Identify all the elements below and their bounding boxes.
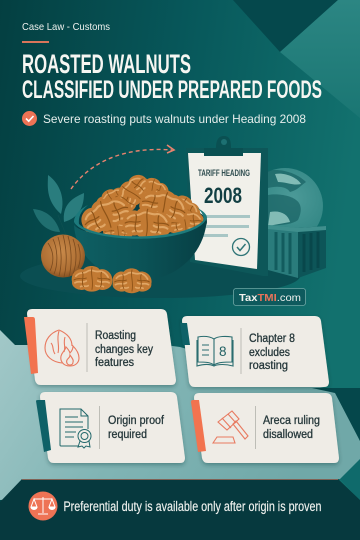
accent rule [22, 41, 49, 43]
icon: certificate with seal [60, 409, 91, 448]
arrow: walnuts to tariff heading [71, 145, 174, 189]
text: required [108, 429, 147, 441]
text: Origin proof [108, 415, 165, 427]
TaxTMI logo [234, 288, 306, 306]
panel: origin proof required [36, 392, 185, 463]
walnut kernels in bowl [76, 169, 205, 240]
divider [99, 406, 100, 449]
icon: gavel [213, 411, 248, 443]
hero platform [20, 254, 300, 298]
divider [255, 406, 256, 449]
text: roasting [249, 360, 288, 372]
clipboard: tariff heading 2008 [186, 136, 268, 276]
icon: leaves [33, 175, 84, 235]
loose walnut kernels [72, 266, 152, 293]
text: Areca ruling [263, 415, 320, 427]
text: changes key [95, 344, 153, 356]
TaxTMI logo: TaxTMI.com [239, 292, 301, 304]
text: Roasting [95, 330, 136, 342]
icon: walnut and flame [45, 330, 79, 366]
text [263, 415, 320, 441]
divider [86, 323, 88, 372]
panel: chapter 8 excludes roasting [180, 316, 329, 387]
icon: open book with 8: 8 [219, 344, 227, 359]
title [22, 49, 322, 104]
divider [240, 328, 242, 374]
text: disallowed [263, 429, 313, 441]
subtitle with check icon: Severe roasting puts walnuts under Heading 2008 [43, 112, 306, 126]
text [249, 333, 295, 372]
text: excludes [249, 347, 290, 359]
shipping container [268, 225, 326, 278]
clipboard: tariff heading 2008: 2008 [204, 183, 242, 208]
text: features [95, 357, 134, 369]
panel: areca ruling disallowed [191, 393, 339, 463]
accent bar [24, 317, 38, 374]
whole walnut [41, 234, 85, 278]
globe [247, 168, 323, 244]
bowl of walnuts [74, 169, 207, 281]
category label: Case Law - Customs [22, 21, 110, 33]
icon: scales of justice [28, 492, 58, 520]
text [108, 415, 165, 441]
accent bar [180, 323, 190, 345]
clipboard: tariff heading 2008: TARIFF HEADING [198, 168, 250, 179]
accent bar [36, 400, 51, 452]
text: Chapter 8 [249, 333, 295, 345]
icon: open book with 8 [197, 336, 233, 366]
footer banner [0, 479, 360, 540]
text [95, 330, 153, 369]
title: ROASTED WALNUTS [22, 49, 191, 79]
accent bar [191, 400, 206, 452]
panel: roasting changes key features [24, 309, 176, 385]
